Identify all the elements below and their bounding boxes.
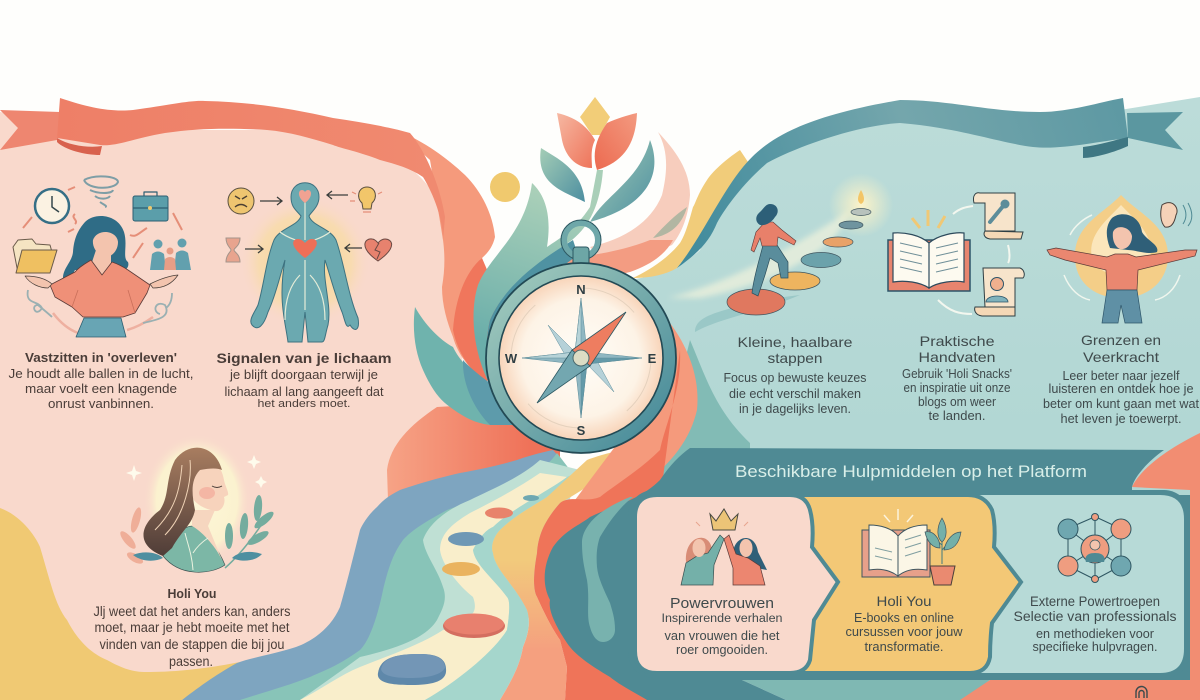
icon: crown <box>696 509 748 530</box>
right face <box>740 539 752 557</box>
text: Kleine, haalbare stappen <box>724 334 867 416</box>
right leaf <box>590 140 654 222</box>
angry face <box>228 188 254 214</box>
glow <box>239 196 371 328</box>
ribbon tail <box>0 110 60 150</box>
illustration: woman with open arms and ear <box>1047 195 1197 323</box>
yellow to peach band <box>492 447 637 700</box>
connector lines <box>1068 517 1121 579</box>
text: Powervrouwen: Powervrouwen <box>670 595 774 612</box>
text: Holi You intro: Holi You <box>168 586 217 601</box>
text: Holi You card <box>846 594 963 654</box>
text: Kleine, haalbare stappen: Focus op bewuste keuzes <box>724 370 867 385</box>
hair <box>143 448 222 556</box>
left petal <box>557 113 595 168</box>
text: Externe Powertroepen <box>1014 594 1177 654</box>
sweater and arms <box>1047 248 1197 290</box>
compass letters: W <box>505 351 518 366</box>
rays <box>884 509 913 522</box>
teal left wave <box>414 307 515 425</box>
compass neck <box>573 247 589 267</box>
glow flame <box>1075 195 1168 298</box>
icon: two women high five <box>681 535 767 585</box>
heading: Beschikbare Hulpmiddelen: Beschikbare Hulpmiddelen op het Platform <box>735 462 1087 481</box>
stone 2 <box>485 508 513 518</box>
left leaf <box>540 148 585 202</box>
left hand <box>25 276 52 288</box>
hourglass <box>226 238 240 262</box>
text: Holi You card: cursussen voor jouw <box>846 624 963 639</box>
book back <box>862 530 930 577</box>
halo <box>143 434 251 566</box>
right woman <box>724 535 765 585</box>
card: Externe Powertroepen <box>970 495 1184 673</box>
text: Grenzen en Veerkracht <box>1043 332 1200 426</box>
compass loop outline <box>561 220 601 260</box>
right leaf branch <box>225 515 268 568</box>
text: Grenzen en Veerkracht: het leven je toewerpt. <box>1060 412 1182 426</box>
text: Powervrouwen: Inspirerende verhalen <box>662 613 782 625</box>
river path <box>182 447 637 700</box>
text: Holi You card: Holi You <box>876 594 932 609</box>
text: Holi You card: E-books en online <box>854 610 954 625</box>
left woman <box>681 535 724 585</box>
connector arcs <box>938 206 1010 314</box>
cream path <box>300 473 567 700</box>
text: Powervrouwen <box>662 595 782 657</box>
legs <box>752 245 788 296</box>
pot <box>930 566 955 585</box>
candle glow <box>829 173 893 237</box>
pale arc <box>53 313 153 333</box>
plant <box>930 525 953 564</box>
text: Grenzen en Veerkracht: Grenzen en <box>1081 332 1161 348</box>
icon: logo mark <box>1136 686 1147 698</box>
folder <box>13 239 57 273</box>
panel: right teal background <box>630 97 1200 500</box>
left ribbon <box>0 98 445 240</box>
body lines <box>280 200 330 320</box>
text: Praktische Handvaten: Gebruik 'Holi Snacks' <box>902 367 1012 381</box>
compass needle <box>537 312 626 403</box>
icon: book and plant <box>862 509 961 585</box>
sound waves <box>1183 203 1192 226</box>
stone 3 <box>448 532 484 546</box>
rays <box>912 210 945 228</box>
mid teal corner <box>650 340 750 500</box>
text: Kleine, haalbare stappen: Kleine, haalbare <box>738 334 853 350</box>
text: Externe Powertroepen: en methodieken voor <box>1036 626 1155 641</box>
text: Signalen van je lichaam: Signalen van je lichaam <box>216 350 392 366</box>
ribbon fold <box>1083 137 1128 158</box>
compass pivot <box>573 350 589 366</box>
illustration: book and scrolls <box>888 193 1024 316</box>
back petal <box>580 97 610 135</box>
illustration: overwhelmed woman <box>13 176 191 337</box>
plant leaves <box>925 518 961 550</box>
flame <box>858 190 864 204</box>
face <box>185 458 228 511</box>
arm creases <box>72 290 135 313</box>
grey leaf <box>653 207 687 238</box>
text: Holi You intro: passen. <box>169 654 213 669</box>
hair <box>1107 214 1157 253</box>
compass letters: N <box>576 282 586 297</box>
vibration arcs <box>1064 215 1180 300</box>
hair <box>63 216 128 280</box>
teal green wave <box>474 170 603 385</box>
text: Grenzen en Veerkracht: beter om kunt gaan met wat <box>1043 397 1200 411</box>
right hand <box>150 275 178 288</box>
cheek <box>199 487 215 499</box>
central person <box>1085 553 1105 562</box>
inner light <box>1091 205 1151 275</box>
text: Holi You intro: vinden van de stappen die bij jou <box>100 637 284 652</box>
card: Holi You <box>790 495 1021 673</box>
green teal band <box>240 453 570 700</box>
text: Signalen van je lichaam: het anders moet. <box>258 398 350 410</box>
darker teal left wave <box>463 360 515 425</box>
skirt <box>76 318 126 337</box>
ear <box>1161 203 1177 227</box>
text: Grenzen en Veerkracht: luisteren en ontdek hoe je <box>1048 382 1194 396</box>
torso and arms <box>751 222 796 252</box>
hair <box>756 204 778 225</box>
book pages <box>893 233 964 288</box>
compass <box>486 220 676 453</box>
sweater <box>50 260 150 317</box>
eye <box>212 486 222 488</box>
compass letters <box>505 282 657 438</box>
text: Externe Powertroepen: Selectie van professionals <box>1014 609 1177 624</box>
scroll wrench <box>973 193 1023 239</box>
arrows <box>23 187 182 258</box>
ribbon tail <box>1127 112 1183 150</box>
compass letters: S <box>577 423 586 438</box>
compass face <box>499 276 663 440</box>
garment <box>163 526 225 572</box>
ribbon body <box>677 98 1128 268</box>
text: Grenzen en Veerkracht: Veerkracht <box>1083 349 1159 365</box>
stone 5 <box>443 614 505 638</box>
text: Praktische Handvaten: Praktische <box>920 333 995 349</box>
garment veins <box>185 533 208 570</box>
text: Kleine, haalbare stappen: in je dagelijks leven. <box>739 401 851 416</box>
blue band <box>182 450 570 700</box>
tornado <box>84 176 118 207</box>
swirls <box>28 290 172 323</box>
text: Praktische Handvaten: en inspiratie uit onze <box>904 381 1011 395</box>
right light stream <box>668 210 850 298</box>
right petal <box>595 113 637 170</box>
shape: coral bottom-right <box>955 433 1200 700</box>
face <box>93 232 118 257</box>
text: Signalen van je lichaam <box>216 350 392 410</box>
card outline <box>628 490 1190 678</box>
text: Holi You intro: moet, maar je hebt moeite met het <box>94 620 290 635</box>
stone 1 <box>523 495 539 501</box>
shape: lighter teal drop <box>582 497 633 642</box>
illustration: Holi You woman profile <box>118 434 276 572</box>
illustration: body signals <box>226 183 392 342</box>
peach under flame <box>533 240 673 278</box>
text: Vastzitten in overleven: onrust vanbinnen. <box>48 396 154 411</box>
text: Kleine, haalbare stappen: die echt verschil maken <box>729 386 861 401</box>
illustration: stepping stones <box>727 173 893 315</box>
sparkles <box>126 455 267 488</box>
nodes <box>1058 514 1131 582</box>
text: Powervrouwen: van vrouwen die het <box>664 628 780 643</box>
text: Signalen van je lichaam: je blijft doorgaan terwijl je <box>229 367 378 382</box>
stone 4 <box>442 562 480 576</box>
text: Holi You intro <box>94 586 291 669</box>
peach right of compass <box>560 323 698 530</box>
bottom leaves <box>133 552 262 561</box>
stone 5 top <box>444 614 504 634</box>
right leaves <box>225 495 276 549</box>
right teal wisp <box>695 295 800 332</box>
left hair <box>686 538 714 562</box>
neck <box>92 250 111 275</box>
broken heart <box>365 239 392 261</box>
body figure <box>251 183 358 342</box>
light teal right band <box>425 472 578 700</box>
text: Holi You card: transformatie. <box>864 639 944 654</box>
book lines <box>900 243 958 272</box>
book lines <box>875 535 921 560</box>
ribbon body <box>57 98 445 240</box>
pants <box>1102 290 1142 323</box>
briefcase <box>133 192 168 221</box>
text: Praktische Handvaten: blogs om weer <box>918 395 996 409</box>
coral right band <box>534 350 680 700</box>
compass letters: E <box>648 351 657 366</box>
right hair <box>733 538 767 570</box>
brain heart <box>299 190 311 203</box>
shape: teal bottom strip <box>742 680 990 700</box>
arrows <box>245 191 362 253</box>
hair highlights <box>155 460 190 535</box>
right ribbon <box>677 98 1183 268</box>
sun <box>490 172 520 202</box>
shape: yellow bottom-left <box>0 508 240 700</box>
stone 6 <box>378 654 446 685</box>
icon: network of people <box>1058 514 1131 582</box>
ribbon fold <box>57 138 102 155</box>
text: Praktische Handvaten: Handvaten <box>918 349 996 365</box>
lightbulb <box>350 187 382 212</box>
compass star <box>522 298 642 418</box>
face <box>1113 227 1132 249</box>
text: Praktische Handvaten <box>902 333 1012 423</box>
inner ring <box>511 288 651 428</box>
compass loop <box>564 223 598 257</box>
clock <box>35 189 69 223</box>
panel: left pink background <box>0 112 465 700</box>
text: Vastzitten in overleven: maar voelt een knagende <box>25 381 177 396</box>
yellow band behind right ribbon <box>633 150 750 278</box>
stones <box>727 208 871 315</box>
tulip with leaves <box>540 97 654 222</box>
text: Kleine, haalbare stappen: stappen <box>768 350 822 366</box>
book pages <box>869 525 927 576</box>
text: Vastzitten in overleven: Vastzitten in 'overleven' <box>25 350 177 365</box>
mint band <box>300 460 580 700</box>
book cover <box>888 240 970 291</box>
peach wave <box>397 130 495 383</box>
text: Vastzitten in overleven <box>8 350 194 411</box>
coral inner wave <box>453 258 500 383</box>
panel: dark teal resources background <box>545 448 1190 700</box>
neck and chest <box>192 510 222 560</box>
compass bezel <box>486 263 676 453</box>
scroll person <box>975 268 1024 316</box>
pale pink flame <box>590 132 690 258</box>
text: Externe Powertroepen: specifieke hulpvragen. <box>1032 639 1158 654</box>
heart <box>293 239 317 258</box>
text: Holi You intro: Jlj weet dat het anders kan, anders <box>94 604 291 619</box>
text: Praktische Handvaten: te landen. <box>928 409 986 423</box>
stone 6 top <box>381 654 445 678</box>
left face <box>692 539 706 557</box>
left leaves <box>118 506 145 566</box>
text: Powervrouwen: roer omgooiden. <box>676 642 768 657</box>
dark inner wave <box>487 240 578 385</box>
resources card group <box>628 490 1190 678</box>
family <box>150 238 191 270</box>
text: Vastzitten in overleven: Je houdt alle ballen in de lucht, <box>8 366 194 381</box>
text: Externe Powertroepen: Externe Powertroepen <box>1030 594 1160 609</box>
card: Powervrouwen <box>635 495 838 673</box>
text: Grenzen en Veerkracht: Leer beter naar jezelf <box>1062 369 1180 383</box>
text: Signalen van je lichaam: lichaam al lang aangeeft dat <box>224 384 384 399</box>
central head <box>1090 540 1100 550</box>
shape: coral blob under compass <box>387 400 560 500</box>
